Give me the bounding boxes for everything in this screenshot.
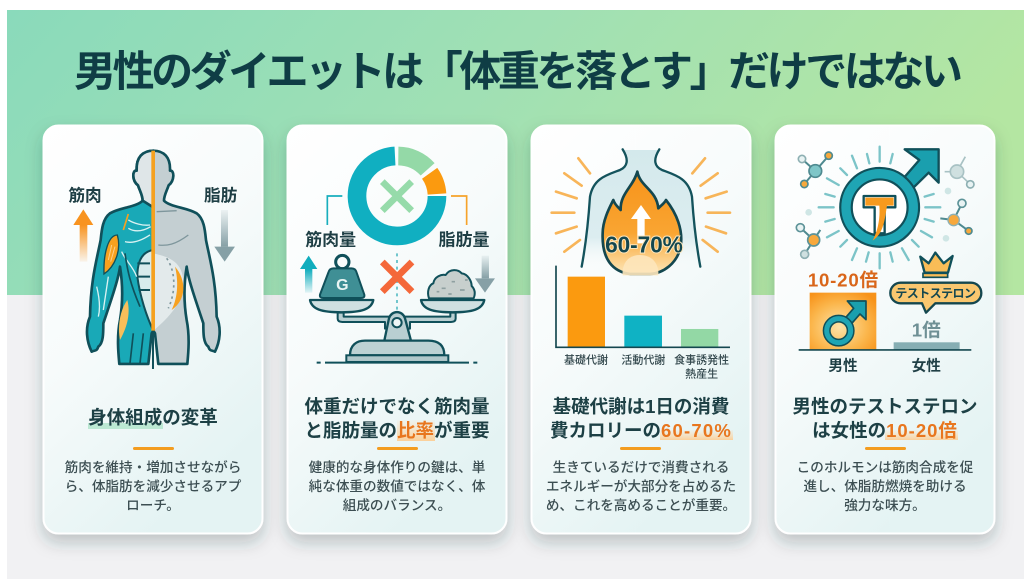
text: body composition description xyxy=(65,459,242,513)
callout: testosterone xyxy=(890,283,981,313)
panel: testosterone xyxy=(776,126,994,534)
label: fat: 脂肪 xyxy=(204,186,238,205)
icon: flame in torso with bar chart xyxy=(552,149,730,380)
panel: body composition xyxy=(44,126,262,534)
text: testosterone description xyxy=(797,459,974,513)
arrow: fat down xyxy=(214,210,235,262)
text: basal metabolism description xyxy=(546,459,736,513)
callout: testosterone: テストステロン xyxy=(895,287,976,301)
heading: testosterone: 男性のテストステロン xyxy=(792,396,978,417)
text: basal metabolism description: め、これを高めることが重要。 xyxy=(546,497,736,513)
chart: energy expenditure bars xyxy=(556,266,730,380)
label: 1x: 1倍 xyxy=(912,320,941,341)
chart: energy expenditure bars: 食事誘発性 xyxy=(674,352,729,366)
icon: male symbol with molecules and comparison xyxy=(796,147,981,374)
heading: ratio: と脂肪量の比率が重要 xyxy=(304,420,490,441)
icon: donut and balance scale xyxy=(300,156,495,363)
heading: ratio: 体重だけでなく筋肉量 xyxy=(304,396,490,417)
label: 60-70%: 60-70% xyxy=(605,231,683,257)
heading: body composition: 身体組成の変革 xyxy=(88,407,218,428)
text: basal metabolism description: エネルギーが大部分を占めるた xyxy=(546,478,736,494)
heading: basal metabolism: 費カロリーの60-70% xyxy=(550,420,732,441)
panel: muscle and fat ratio xyxy=(288,126,506,534)
text: ratio description: 健康的な身体作りの鍵は、単 xyxy=(309,459,485,475)
heading: testosterone: は女性の10-20倍 xyxy=(812,420,958,441)
label: fat mass: 脂肪量 xyxy=(438,230,489,249)
label: female: 女性 xyxy=(912,357,941,374)
text: ratio description: 組成のバランス。 xyxy=(343,498,451,513)
text: body composition description: 筋肉を維持・増加させながら xyxy=(65,459,241,475)
icon: crown xyxy=(920,253,953,277)
label: muscle: 筋肉 xyxy=(68,186,102,205)
label: muscle mass: 筋肉量 xyxy=(305,230,356,249)
arrow: muscle mass up xyxy=(300,256,317,293)
text: ratio description: 純な体重の数値ではなく、体 xyxy=(309,478,486,494)
heading: basal metabolism: 基礎代謝は1日の消費 xyxy=(553,396,729,417)
icon: molecules xyxy=(796,152,974,258)
icon: fat lump xyxy=(428,270,475,298)
heading: basal metabolism xyxy=(550,396,733,441)
icon: flame xyxy=(603,172,681,274)
title: 男性のダイエットは「体重を落とす」だけではない xyxy=(74,48,963,95)
text: testosterone description: このホルモンは筋肉合成を促 xyxy=(797,459,974,475)
heading: ratio xyxy=(304,396,490,441)
icon: male symbol with T xyxy=(846,149,939,241)
icon: weight G: G xyxy=(336,277,349,294)
text: basal metabolism description: 生きているだけで消費される xyxy=(553,459,729,475)
text: testosterone description: 進し、体脂肪燃焼を助ける xyxy=(803,478,967,494)
arrow: fat mass down xyxy=(475,256,495,293)
text: testosterone description: 強力な味方。 xyxy=(844,498,926,513)
icon: small male symbol xyxy=(827,301,866,343)
icon: split human body xyxy=(68,151,238,369)
icon: weight G xyxy=(320,255,364,298)
panel: basal metabolism xyxy=(532,126,750,534)
text: ratio description xyxy=(309,459,486,513)
arrow: muscle up xyxy=(73,209,93,262)
label: male: 男性 xyxy=(828,357,858,374)
label: 10-20x: 10-20倍 xyxy=(808,270,878,291)
text: body composition description: ローチ。 xyxy=(126,498,180,513)
text: body composition description: ら、体脂肪を減少させるアプ xyxy=(65,478,242,494)
heading: testosterone xyxy=(792,396,978,441)
chart: energy expenditure bars: 活動代謝 xyxy=(621,352,665,366)
chart: energy expenditure bars: 熱産生 xyxy=(685,366,718,380)
chart: energy expenditure bars: 基礎代謝 xyxy=(564,352,608,366)
chart: donut xyxy=(357,156,437,236)
